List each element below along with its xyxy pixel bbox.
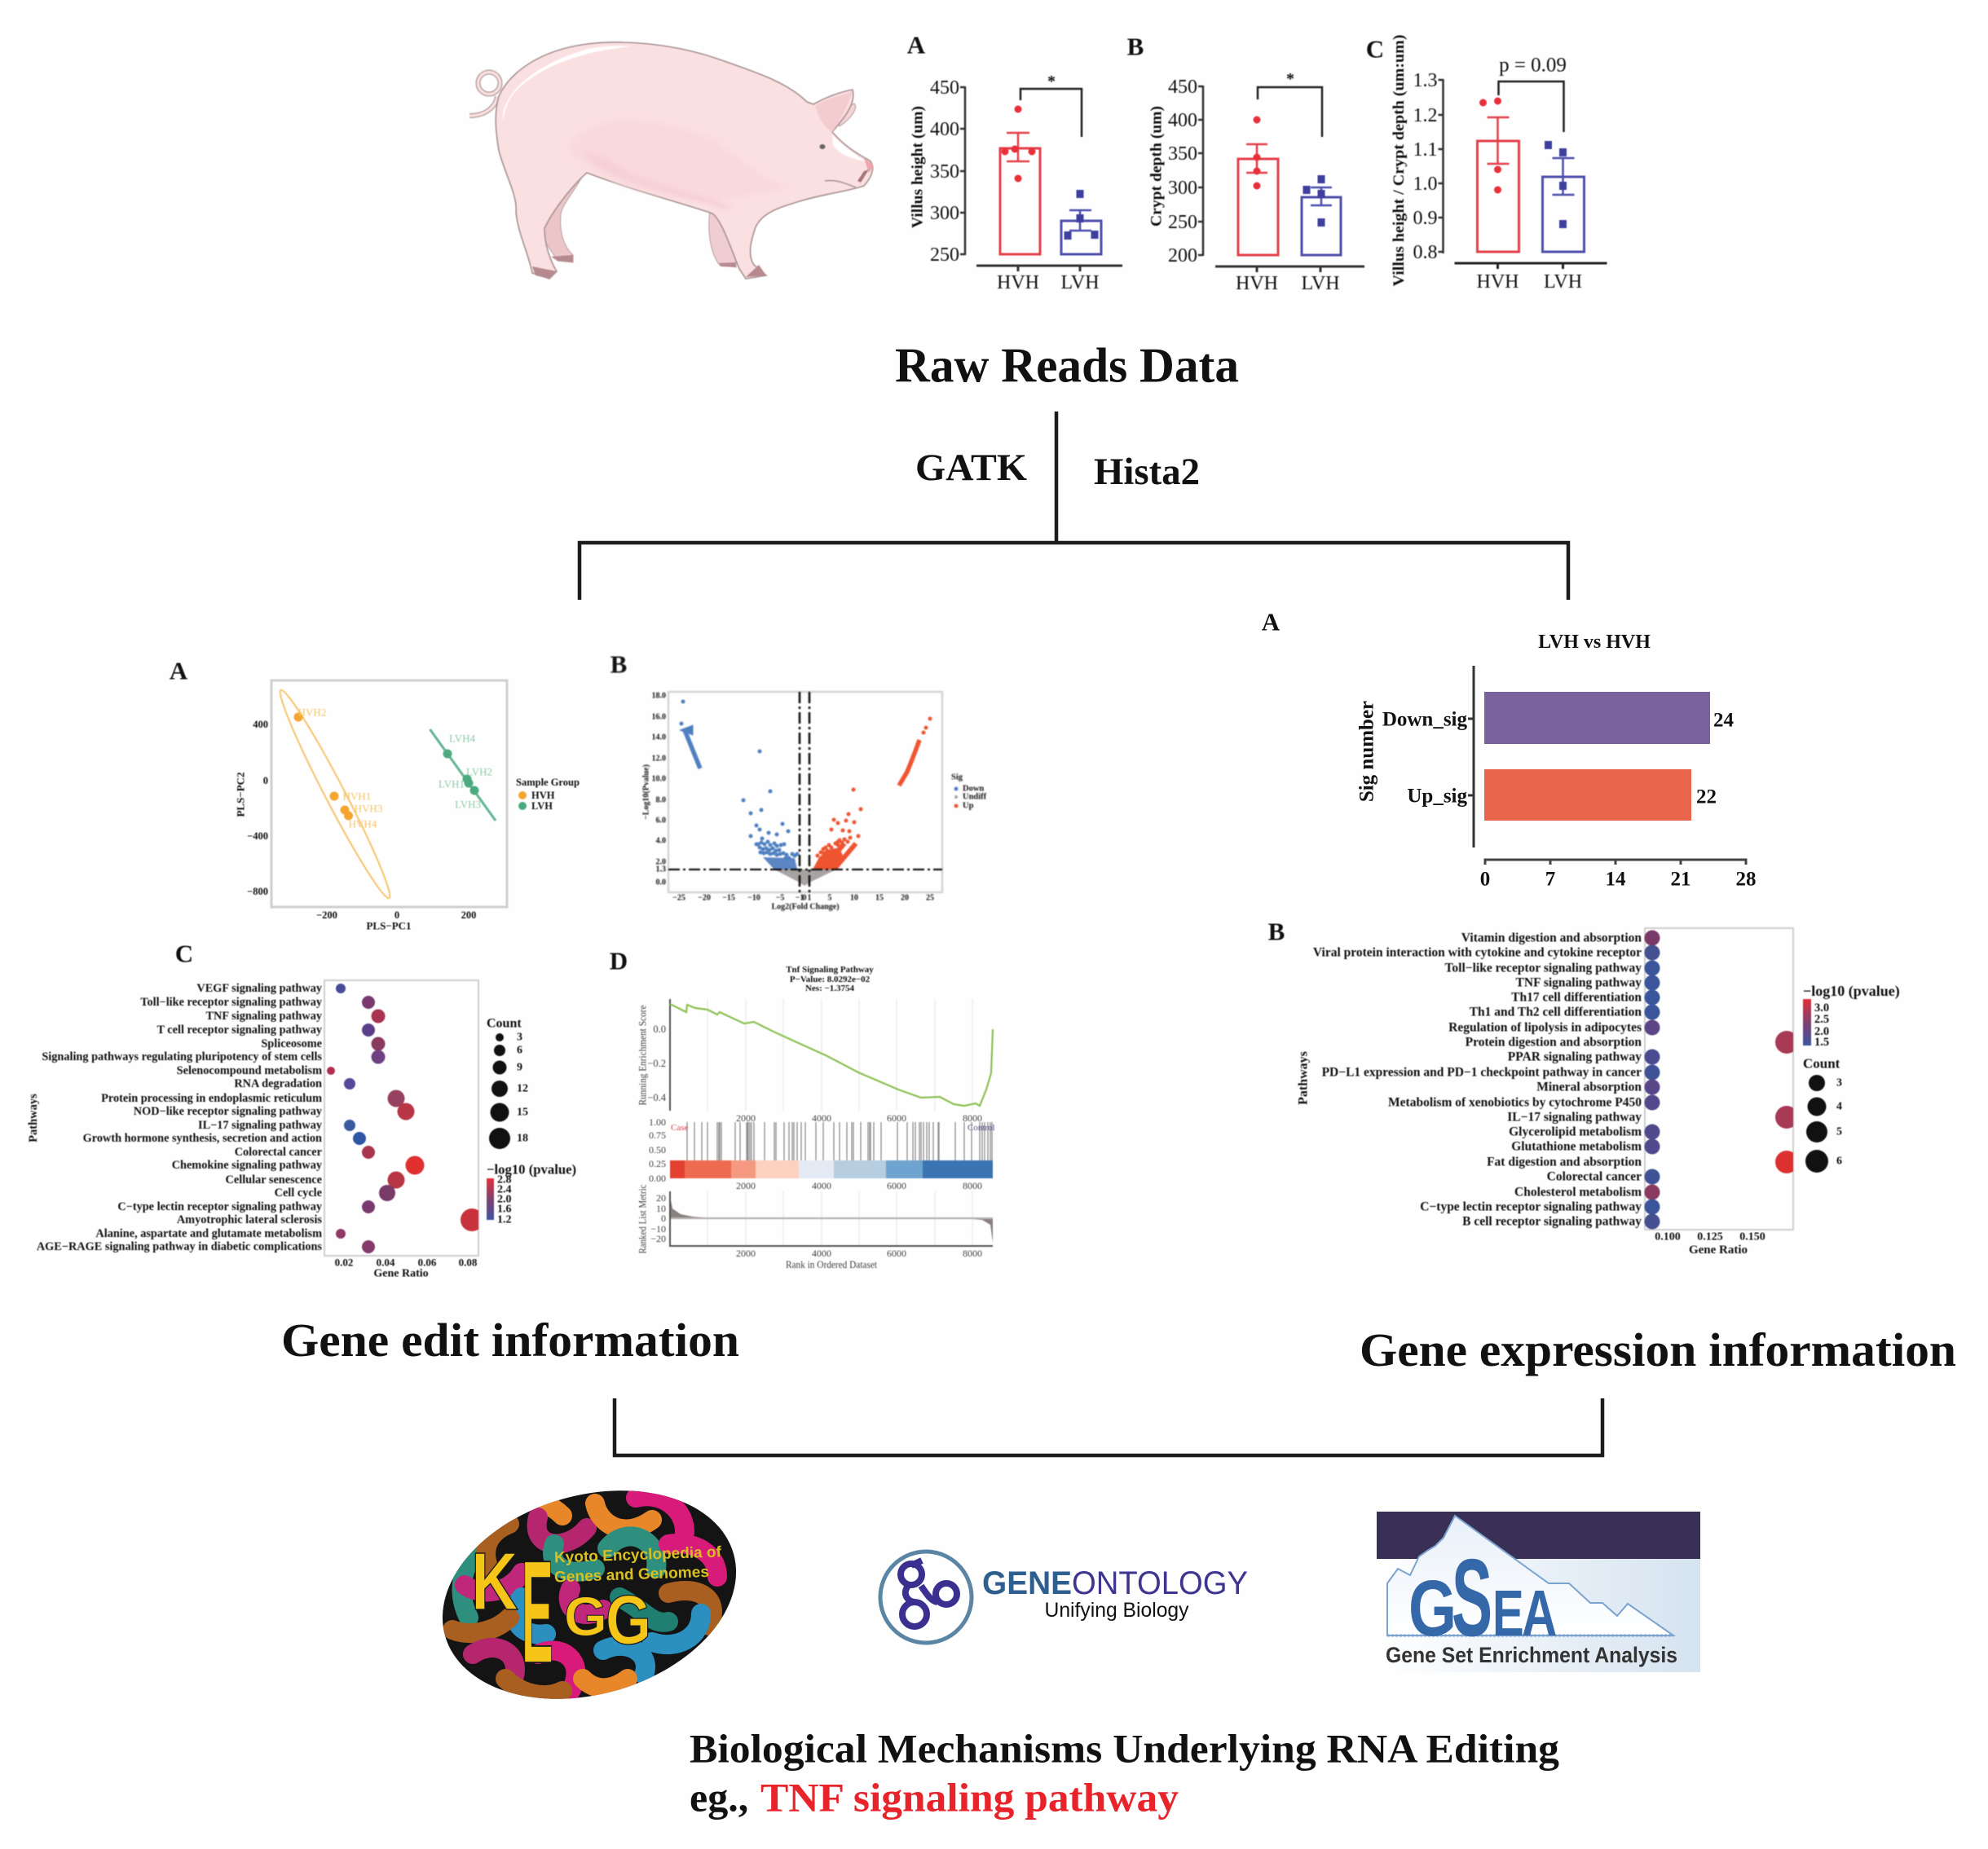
icon: KEGG logo: G <box>606 1581 651 1658</box>
panel: gene edit PLS-DA plot: HVH4 <box>349 818 377 830</box>
panel: gene expression significance bar chart: 7 <box>1545 869 1555 890</box>
panel: gene edit PLS-DA plot: LVH2 <box>466 766 492 777</box>
text: biological mechanisms conclusion: eg., <box>690 1775 748 1820</box>
chart: crypt depth: 350 <box>1168 143 1197 165</box>
chart: villus height: Villus height (um) <box>910 106 926 228</box>
panel: gene expression pathway dot plot: Viral protein interaction with cytokine and cytokine receptor <box>1313 945 1642 960</box>
panel letter: bars B: B <box>1127 33 1144 60</box>
panel: gene expression pathway dot plot: Pathways <box>1296 1051 1311 1105</box>
panel: gene edit pathway dot plot: 15 <box>517 1107 528 1118</box>
panel: gene expression pathway dot plot: 0.100 <box>1655 1230 1681 1244</box>
icon: GSEA logo: G <box>1408 1565 1457 1653</box>
panel: gene edit volcano plot: Log2(Fold Change) <box>771 903 840 911</box>
panel: gene edit PLS-DA plot: LVH <box>531 800 553 812</box>
panel: GSEA enrichment plot <box>610 947 995 1270</box>
panel: gene expression significance bar chart: LVH vs HVH <box>1538 632 1651 653</box>
panel: gene edit volcano plot: 20 <box>901 893 909 903</box>
chart: crypt depth: LVH <box>1301 273 1340 294</box>
panel: gene edit volcano plot: 4.0 <box>655 836 666 846</box>
panel: gene edit pathway dot plot: 12 <box>517 1082 528 1095</box>
chart: crypt depth: * <box>1286 70 1294 88</box>
panel: gene edit pathway dot plot: 1.6 <box>497 1203 512 1216</box>
heading: gene expression information: Gene expression information <box>1360 1323 1956 1376</box>
icon: GSEA logo: Gene Set Enrichment Analysis <box>1386 1643 1677 1667</box>
panel: GSEA enrichment plot: 6000 <box>887 1248 906 1259</box>
panel: GSEA enrichment plot: 0.00 <box>649 1173 666 1184</box>
panel: gene edit PLS-DA plot: 400 <box>253 719 268 730</box>
panel: gene edit pathway dot plot: Chemokine signaling pathway <box>172 1159 323 1172</box>
panel: gene edit pathway dot plot: TNF signaling pathway <box>206 1010 323 1023</box>
panel: gene expression significance bar chart: 22 <box>1696 786 1717 808</box>
chart: villus height to crypt depth ratio: LVH <box>1544 271 1582 293</box>
panel: gene edit pathway dot plot: −log10 (pvalue) <box>487 1162 576 1177</box>
panel: GSEA enrichment plot: 2000 <box>736 1112 756 1124</box>
panel: gene edit volcano plot: 14.0 <box>652 733 666 742</box>
panel: gene edit pathway dot plot: 0.04 <box>377 1257 395 1268</box>
panel: gene edit PLS-DA plot: −400 <box>247 830 268 842</box>
panel: gene edit PLS-DA plot: 0 <box>395 909 399 921</box>
text: biological mechanisms conclusion <box>690 1726 1559 1820</box>
panel: gene edit pathway dot plot: T cell receptor signaling pathway <box>156 1024 323 1037</box>
panel: gene edit PLS-DA plot: LVH4 <box>449 732 476 745</box>
panel letter: B <box>1268 918 1285 945</box>
panel letter: B <box>611 650 627 678</box>
panel: gene edit volcano plot: 8.0 <box>655 795 666 805</box>
panel: gene edit volcano plot <box>611 650 987 911</box>
panel: gene expression pathway dot plot: 4 <box>1836 1100 1842 1113</box>
panel: GSEA enrichment plot: 8000 <box>963 1180 982 1191</box>
panel: gene edit pathway dot plot: Cell cycle <box>275 1186 322 1200</box>
chart: crypt depth: 300 <box>1168 178 1197 199</box>
panel: gene edit PLS-DA plot: PLS−PC2 <box>235 772 246 817</box>
panel: GSEA enrichment plot: 0.25 <box>649 1158 666 1169</box>
panel: gene edit volcano plot: Up <box>963 802 974 810</box>
panel: gene edit pathway dot plot: 0.02 <box>335 1257 353 1268</box>
panel: gene expression significance bar chart: 24 <box>1713 709 1735 732</box>
panel: gene edit volcano plot: Undiff <box>963 792 987 802</box>
heading: raw reads data: Raw Reads Data <box>895 339 1239 393</box>
chart: villus height to crypt depth ratio: HVH <box>1477 271 1519 293</box>
icon: GSEA logo <box>1377 1512 1700 1672</box>
chart: villus height to crypt depth ratio: 1.3 <box>1413 70 1438 91</box>
panel: gene expression pathway dot plot: 2.5 <box>1814 1013 1829 1026</box>
panel: GSEA enrichment plot: 20 <box>656 1192 666 1204</box>
panel: gene edit pathway dot plot: Protein processing in endoplasmic reticulum <box>101 1092 322 1105</box>
panel: gene edit PLS-DA plot: 200 <box>461 909 476 921</box>
panel: GSEA enrichment plot: 4000 <box>812 1248 831 1259</box>
panel letter: C <box>175 939 193 968</box>
panel: GSEA enrichment plot: 6000 <box>887 1112 906 1124</box>
panel: gene edit volcano plot: −10 <box>747 893 760 903</box>
panel letter: A <box>1262 608 1281 636</box>
panel: gene expression pathway dot plot: Th1 and Th2 cell differentiation <box>1470 1006 1642 1019</box>
panel: GSEA enrichment plot: 4000 <box>812 1112 831 1124</box>
panel: gene expression pathway dot plot: B cell receptor signaling pathway <box>1462 1214 1642 1229</box>
panel: gene edit volcano plot: 6.0 <box>655 817 666 825</box>
chart: crypt depth: Crypt depth (um) <box>1148 106 1166 227</box>
panel: gene edit pathway dot plot: VEGF signaling pathway <box>196 982 323 995</box>
panel: gene edit pathway dot plot: Count <box>487 1017 522 1030</box>
panel: GSEA enrichment plot: 8000 <box>963 1248 982 1259</box>
panel: GSEA enrichment plot: Ranked List Metric <box>636 1184 649 1253</box>
panel: gene edit PLS-DA plot: HVH3 <box>355 802 382 815</box>
chart: villus height: 450 <box>930 77 959 99</box>
text: biological mechanisms conclusion: Biological Mechanisms Underlying RNA Editing <box>690 1726 1559 1772</box>
panel: gene edit pathway dot plot: 2.4 <box>497 1183 512 1196</box>
chart: villus height <box>910 73 1122 293</box>
panel: gene edit volcano plot: 16.0 <box>652 712 666 722</box>
chart: crypt depth: 200 <box>1168 245 1197 266</box>
panel: gene expression significance bar chart: 21 <box>1671 869 1690 890</box>
chart: villus height: 300 <box>930 203 959 224</box>
icon: KEGG logo: G <box>564 1586 607 1648</box>
chart: villus height: HVH <box>997 272 1039 293</box>
panel: gene edit pathway dot plot: AGE−RAGE signaling pathway in diabetic complications <box>37 1240 322 1253</box>
panel: gene edit PLS-DA plot: HVH2 <box>298 706 326 719</box>
panel: gene expression pathway dot plot: 5 <box>1836 1126 1842 1138</box>
icon: KEGG logo: Kyoto Encyclopedia of <box>554 1543 722 1566</box>
panel: gene edit volcano plot: Down <box>963 784 984 794</box>
label: GATK: GATK <box>915 447 1027 489</box>
panel: gene edit volcano plot: 1 <box>807 893 812 903</box>
panel: gene edit pathway dot plot: IL−17 signaling pathway <box>198 1119 323 1132</box>
panel: gene edit volcano plot: −Log10(Pvalue) <box>642 764 650 820</box>
panel: gene expression pathway dot plot: 2.0 <box>1814 1025 1829 1038</box>
panel: gene edit pathway dot plot: 3 <box>517 1032 522 1043</box>
panel letter: bars A: A <box>907 31 926 59</box>
panel: gene expression pathway dot plot: 1.5 <box>1814 1036 1829 1049</box>
panel: gene edit volcano plot: 12.0 <box>652 755 666 763</box>
panel: gene edit pathway dot plot: C−type lectin receptor signaling pathway <box>117 1200 323 1213</box>
icon: Gene Ontology logo: Unifying Biology <box>1045 1599 1189 1622</box>
panel: gene expression pathway dot plot: 6 <box>1836 1156 1842 1167</box>
panel: gene edit volcano plot: −5 <box>776 893 784 903</box>
panel: gene edit pathway dot plot: 9 <box>517 1061 522 1074</box>
panel: GSEA enrichment plot: 0.50 <box>649 1144 666 1156</box>
panel: gene edit pathway dot plot: 1.2 <box>497 1214 512 1226</box>
panel: GSEA enrichment plot: 0.0 <box>653 1024 666 1035</box>
panel: gene expression pathway dot plot <box>1268 918 1900 1257</box>
chart: villus height: 250 <box>930 244 959 266</box>
panel: gene expression pathway dot plot: Protein digestion and absorption <box>1466 1035 1642 1050</box>
icon: Gene Ontology logo: ONTOLOGY <box>1072 1565 1248 1601</box>
panel: gene expression pathway dot plot: PPAR signaling pathway <box>1508 1050 1642 1064</box>
panel: gene expression pathway dot plot: C−type lectin receptor signaling pathway <box>1420 1200 1642 1214</box>
panel: GSEA enrichment plot: −10 <box>650 1223 666 1235</box>
panel: gene edit PLS-DA plot <box>170 657 580 932</box>
panel letter: bars C: C <box>1366 34 1384 64</box>
chart: villus height to crypt depth ratio: 1.0 <box>1413 174 1438 195</box>
panel: gene edit pathway dot plot: 2.0 <box>497 1193 512 1206</box>
panel: GSEA enrichment plot: 1.00 <box>649 1116 666 1128</box>
panel: gene edit PLS-DA plot: −800 <box>247 886 268 897</box>
panel: gene edit pathway dot plot: Alanine, aspartate and glutamate metabolism <box>95 1227 322 1240</box>
panel: gene edit pathway dot plot: Cellular senescence <box>226 1173 322 1186</box>
panel: gene expression pathway dot plot: IL−17 signaling pathway <box>1507 1110 1642 1125</box>
panel: gene expression pathway dot plot: Regulation of lipolysis in adipocytes <box>1448 1020 1642 1035</box>
panel: gene edit volcano plot: 5 <box>828 893 831 903</box>
panel: gene edit volcano plot: 15 <box>875 893 884 903</box>
panel: gene expression pathway dot plot: Cholesterol metabolism <box>1514 1185 1642 1200</box>
panel: gene expression pathway dot plot: TNF signaling pathway <box>1516 976 1642 989</box>
panel: gene edit pathway dot plot: Colorectal cancer <box>235 1146 323 1159</box>
panel: gene edit volcano plot: 25 <box>926 893 934 903</box>
panel: gene edit volcano plot: 0.0 <box>655 878 666 887</box>
panel: gene edit volcano plot: −25 <box>672 893 685 903</box>
panel: gene edit PLS-DA plot: HVH <box>531 790 555 801</box>
panel: gene expression pathway dot plot: Fat digestion and absorption <box>1487 1156 1642 1169</box>
panel: gene edit pathway dot plot: Spliceosome <box>261 1037 322 1050</box>
panel: gene expression pathway dot plot: Toll−like receptor signaling pathway <box>1444 962 1642 975</box>
icon: GSEA logo: E <box>1492 1577 1524 1649</box>
panel: GSEA enrichment plot: 0.75 <box>649 1129 666 1141</box>
panel: gene edit pathway dot plot: NOD−like receptor signaling pathway <box>134 1105 323 1118</box>
panel: GSEA enrichment plot: Nes: −1.3754 <box>805 984 855 993</box>
panel: gene edit pathway dot plot: 6 <box>517 1045 522 1056</box>
panel letter: D <box>610 947 628 975</box>
panel: gene edit pathway dot plot: 2.8 <box>497 1173 512 1186</box>
panel: gene edit volcano plot: −15 <box>722 893 735 903</box>
icon: KEGG logo: Genes and Genomes <box>554 1564 709 1586</box>
icon: pig illustration <box>469 42 874 279</box>
icon: GSEA logo: A <box>1522 1577 1557 1649</box>
icon: GSEA logo: S <box>1452 1537 1492 1660</box>
panel: gene expression pathway dot plot: −log10 (pvalue) <box>1803 983 1900 1000</box>
chart: villus height to crypt depth ratio: 0.9 <box>1413 208 1438 229</box>
panel: gene expression pathway dot plot: Gene Ratio <box>1689 1244 1748 1257</box>
chart: crypt depth: HVH <box>1236 273 1278 294</box>
panel: gene edit PLS-DA plot: −200 <box>316 909 337 921</box>
panel: gene edit volcano plot: 10 <box>850 893 858 903</box>
panel: GSEA enrichment plot: 2000 <box>736 1248 756 1259</box>
panel: gene expression pathway dot plot: Count <box>1803 1056 1840 1071</box>
panel: gene edit pathway dot plot: Signaling pathways regulating pluripotency of stem cells <box>42 1050 322 1063</box>
panel: gene expression pathway dot plot: Mineral absorption <box>1536 1081 1642 1094</box>
panel: gene edit PLS-DA plot: 0 <box>263 775 268 786</box>
panel: gene edit volcano plot: 2.0 <box>655 857 666 867</box>
panel: gene expression pathway dot plot: Colorectal cancer <box>1547 1170 1642 1183</box>
panel: GSEA enrichment plot: P−Value: 8.0292e−02 <box>790 975 871 984</box>
chart: villus height to crypt depth ratio: 1.2 <box>1413 105 1438 126</box>
chart: villus height: * <box>1047 73 1056 90</box>
panel: gene edit PLS-DA plot: LVH1 <box>439 777 465 790</box>
panel: gene expression pathway dot plot: Th17 cell differentiation <box>1511 991 1642 1004</box>
chart: villus height to crypt depth ratio: 0.8 <box>1413 242 1438 263</box>
panel: gene edit volcano plot: −1 <box>796 893 804 903</box>
panel: gene expression significance bar chart: Up_sig <box>1407 786 1467 807</box>
chart: villus height: LVH <box>1060 272 1100 293</box>
icon: KEGG logo: K <box>471 1537 518 1627</box>
panel: gene expression pathway dot plot: Vitamin digestion and absorption <box>1461 931 1642 945</box>
panel: GSEA enrichment plot: Running Enrichment Score <box>636 1005 649 1105</box>
chart: villus height to crypt depth ratio <box>1391 34 1607 293</box>
panel: gene expression significance bar chart: Down_sig <box>1382 709 1467 730</box>
panel: gene expression pathway dot plot: Metabolism of xenobiotics by cytochrome P450 <box>1388 1095 1642 1110</box>
panel: GSEA enrichment plot: −20 <box>650 1233 666 1244</box>
chart: crypt depth <box>1148 70 1364 294</box>
text: biological mechanisms conclusion: TNF signaling pathway <box>760 1775 1179 1820</box>
panel: gene edit pathway dot plot: 0.08 <box>459 1257 478 1268</box>
panel: GSEA enrichment plot: Control <box>968 1123 995 1133</box>
chart: villus height: 400 <box>930 119 959 140</box>
panel: gene edit pathway dot plot: Gene Ratio <box>373 1268 429 1279</box>
panel: gene edit pathway dot plot: Growth hormone synthesis, secretion and action <box>83 1132 322 1145</box>
panel: gene edit volcano plot: −20 <box>698 893 711 903</box>
chart: crypt depth: 250 <box>1168 212 1197 233</box>
panel: gene edit volcano plot: 18.0 <box>652 691 666 701</box>
arrow: bracket joining both analyses <box>615 1398 1602 1455</box>
panel: gene edit pathway dot plot: Pathways <box>27 1094 40 1142</box>
panel: gene edit pathway dot plot <box>27 939 576 1279</box>
panel: GSEA enrichment plot: −0.4 <box>647 1092 667 1103</box>
panel: GSEA enrichment plot: 2000 <box>736 1180 756 1191</box>
panel: gene edit pathway dot plot: 18 <box>517 1133 528 1144</box>
chart: villus height to crypt depth ratio: Villus height / Crypt depth (um:um) <box>1391 34 1408 287</box>
panel: gene expression pathway dot plot: PD−L1 expression and PD−1 checkpoint pathway in cancer <box>1322 1066 1642 1079</box>
panel: gene edit volcano plot: 10.0 <box>652 774 666 784</box>
panel letter: A <box>170 657 188 685</box>
panel: gene edit pathway dot plot: Selenocompound metabolism <box>177 1064 322 1077</box>
panel: GSEA enrichment plot: Tnf Signaling Pathway <box>786 965 874 975</box>
arrow: branching tree from raw reads <box>580 412 1568 600</box>
panel: gene expression pathway dot plot: Glutathione metabolism <box>1511 1139 1642 1154</box>
panel: gene edit PLS-DA plot: LVH3 <box>455 799 481 810</box>
icon: KEGG logo <box>442 1490 737 1699</box>
panel: GSEA enrichment plot: Case <box>671 1123 688 1133</box>
panel: GSEA enrichment plot: 4000 <box>812 1180 831 1191</box>
panel: gene expression pathway dot plot: 0.125 <box>1697 1230 1723 1244</box>
chart: crypt depth: 400 <box>1168 110 1197 131</box>
icon: Gene Ontology logo <box>880 1552 1248 1643</box>
panel: gene edit pathway dot plot: RNA degradation <box>234 1077 322 1090</box>
panel: gene expression pathway dot plot: 3 <box>1836 1077 1842 1089</box>
panel: gene expression significance bar chart: 14 <box>1606 869 1626 890</box>
panel: GSEA enrichment plot: 6000 <box>887 1180 906 1191</box>
panel: gene expression pathway dot plot: 0.150 <box>1739 1230 1765 1244</box>
panel: gene edit volcano plot: 1.3 <box>655 865 666 874</box>
panel: gene expression pathway dot plot: 3.0 <box>1814 1002 1829 1015</box>
panel: gene expression pathway dot plot: Glycerolipid metabolism <box>1509 1125 1642 1139</box>
panel: GSEA enrichment plot: 8000 <box>963 1112 982 1124</box>
icon: Gene Ontology logo: GENE <box>982 1565 1072 1601</box>
chart: crypt depth: 450 <box>1168 77 1197 98</box>
chart: villus height: 350 <box>930 161 959 183</box>
icon: KEGG logo: E <box>522 1530 553 1694</box>
heading: gene edit information: Gene edit information <box>281 1314 739 1367</box>
panel: gene expression significance bar chart: 28 <box>1736 869 1756 890</box>
panel: gene edit PLS-DA plot: HVH1 <box>343 790 371 802</box>
panel: gene edit pathway dot plot: 0.06 <box>418 1257 437 1268</box>
panel: GSEA enrichment plot: 10 <box>656 1203 666 1214</box>
panel: gene edit volcano plot: Sig <box>951 773 963 782</box>
panel: gene edit pathway dot plot: Toll−like receptor signaling pathway <box>140 996 323 1009</box>
panel: GSEA enrichment plot: 0 <box>661 1213 666 1224</box>
label: Hista2: Hista2 <box>1094 451 1200 493</box>
chart: villus height to crypt depth ratio: p = 0.09 <box>1499 54 1567 77</box>
panel: gene edit PLS-DA plot: PLS−PC1 <box>366 919 412 932</box>
chart: villus height to crypt depth ratio: 1.1 <box>1413 139 1438 161</box>
panel: gene edit PLS-DA plot: Sample Group <box>516 777 580 788</box>
panel: gene expression significance bar chart <box>1262 608 1756 890</box>
panel: gene expression significance bar chart: Sig number <box>1356 701 1377 802</box>
panel: gene edit pathway dot plot: Amyotrophic lateral sclerosis <box>177 1213 322 1226</box>
panel: gene expression significance bar chart: 0 <box>1480 869 1490 890</box>
panel: GSEA enrichment plot: Rank in Ordered Dataset <box>786 1259 877 1270</box>
panel: gene edit volcano plot: 0 <box>802 893 807 903</box>
panel: GSEA enrichment plot: −0.2 <box>647 1058 666 1069</box>
